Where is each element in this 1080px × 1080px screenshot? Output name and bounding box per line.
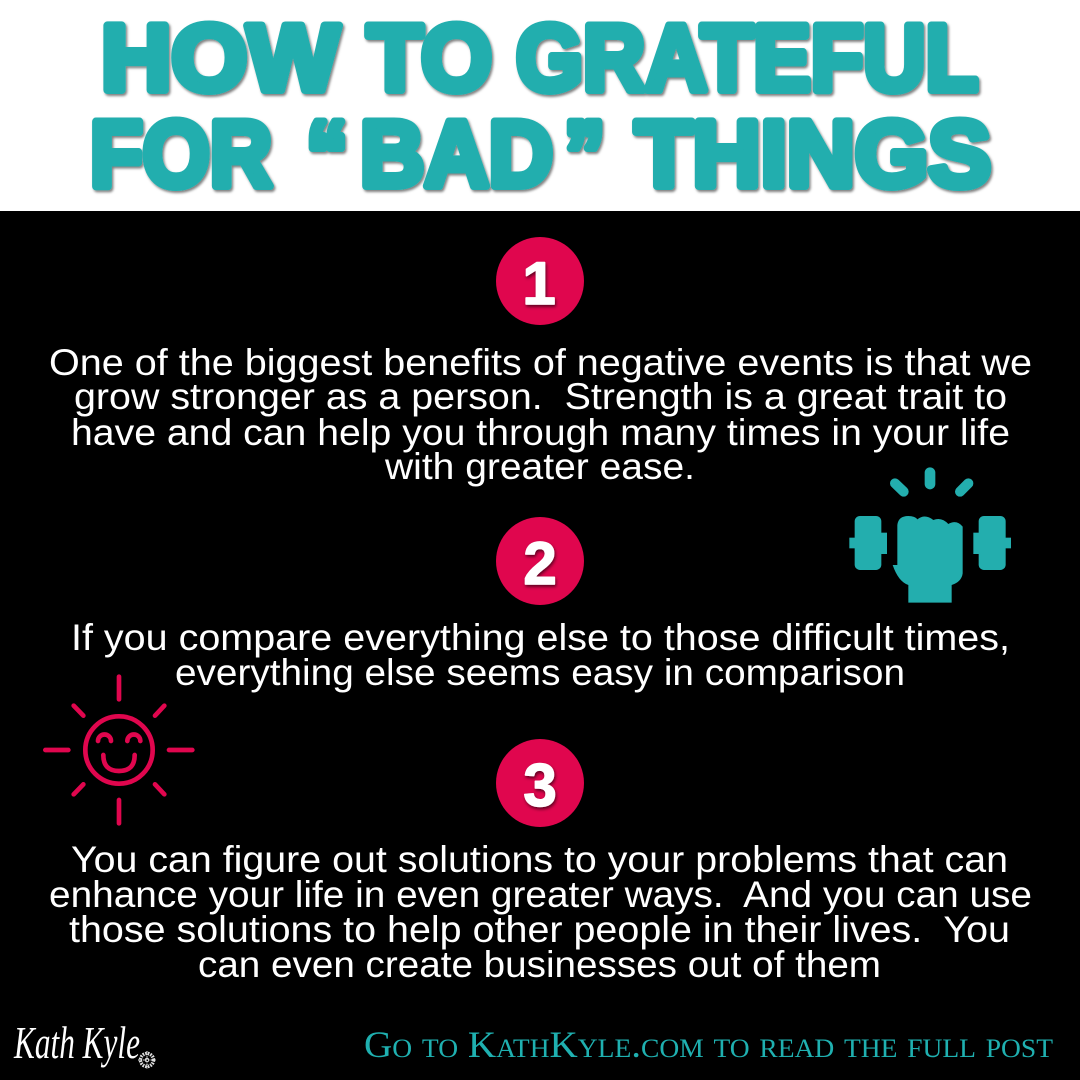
step 1 text: One of the biggest benefits of negative events is that we [49,342,1032,383]
step 3 badge [496,739,584,827]
title: ” [564,101,605,206]
step 1 text: grow stronger as a person. Strength is a great trait to [74,376,1007,417]
footer call to action: Go to KathKyle.com to read the full post [364,1025,1053,1066]
icon: smiling sun [45,677,192,823]
logo: Kath Kyle signature: Kath Kyle [13,1017,140,1068]
step 1 badge [496,237,584,325]
step 1 text [49,342,1032,487]
step 2 text: If you compare everything else to those difficult times, [71,617,1010,658]
step 3 text: enhance your life in even greater ways. And you can use [49,874,1032,915]
title: BAD [360,101,553,206]
title: HOW [101,5,339,110]
step 1 text: with greater ease. [384,446,695,487]
step 3 text: those solutions to help other people in their lives. You [69,909,1010,950]
title: THINGS [635,101,991,206]
title: “ [306,101,348,206]
step 3 badge: 3 [523,752,557,819]
title: FOR [90,101,272,206]
title: TO [367,5,492,110]
icon: fist with dumbbells [849,473,1011,603]
header panel [0,0,1080,211]
step 1 text: have and can help you through many times in your life [71,412,1010,453]
step 2 text: everything else seems easy in comparison [175,652,905,693]
title [90,5,991,206]
step 2 badge: 2 [523,530,557,597]
step 3 text: You can figure out solutions to your problems that can [71,839,1008,880]
step 3 text: can even create businesses out of them [198,944,881,985]
step 3 text [49,839,1032,985]
step 1 badge: 1 [522,250,556,317]
step 2 text [71,617,1010,693]
title: GRATEFUL [516,5,978,110]
step 2 badge [496,517,584,605]
